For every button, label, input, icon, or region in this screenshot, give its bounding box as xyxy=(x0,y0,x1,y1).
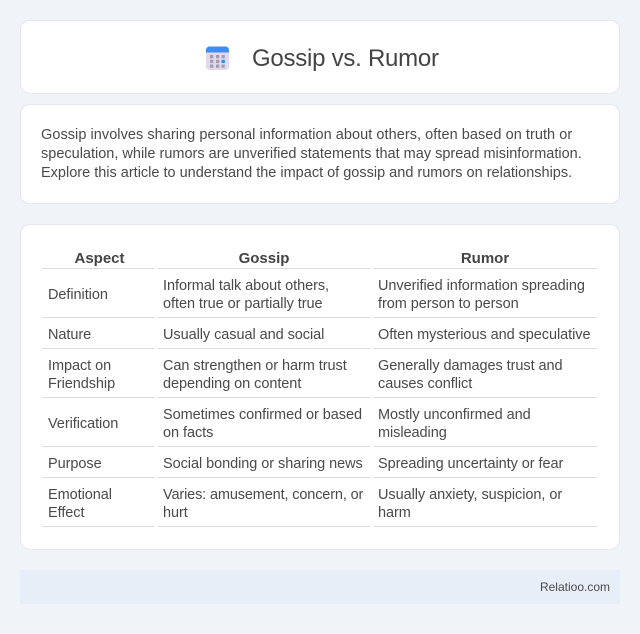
row: Purpose xyxy=(42,456,597,478)
row: Nature: Often mysterious and speculative xyxy=(378,327,590,343)
row: Purpose: Social bonding or sharing news xyxy=(163,456,363,472)
panel: header xyxy=(20,20,620,94)
row: Verification: Sometimes confirmed or based xyxy=(163,407,362,423)
row: Nature xyxy=(42,327,597,349)
row: Emotional Effect: Varies: amusement, concern, or xyxy=(163,487,363,503)
row: Verification: Verification xyxy=(48,416,118,432)
row: Definition: from person to person xyxy=(378,296,519,312)
row: Nature: Nature xyxy=(48,327,91,343)
row: Emotional Effect: Usually anxiety, suspicion, or xyxy=(378,487,562,503)
row: Definition: Unverified information spreading xyxy=(378,278,585,294)
row: Definition: often true or partially true xyxy=(163,296,323,312)
row: Purpose: Purpose xyxy=(48,456,102,472)
footer credit: Relatioo.com xyxy=(540,580,610,594)
row: Verification xyxy=(42,407,597,447)
row: Verification: Mostly unconfirmed and xyxy=(378,407,531,423)
row: Verification: misleading xyxy=(378,425,447,441)
row: Purpose: Spreading uncertainty or fear xyxy=(378,456,563,472)
row: Emotional Effect xyxy=(42,487,597,527)
row: Emotional Effect: harm xyxy=(378,505,411,521)
row: Nature: Usually casual and social xyxy=(163,327,324,343)
row: Definition: Definition xyxy=(48,287,108,303)
icon: calendar xyxy=(206,46,229,70)
title: Gossip vs. Rumor xyxy=(252,45,439,72)
intro paragraph xyxy=(41,127,582,181)
table header row xyxy=(42,250,597,269)
row: Emotional Effect: Emotional xyxy=(48,487,112,503)
row: Emotional Effect: hurt xyxy=(163,505,188,521)
row: Definition xyxy=(42,278,597,318)
row: Impact on Friendship: Generally damages trust and xyxy=(378,358,563,374)
row: Impact on Friendship: Friendship xyxy=(48,376,115,392)
row: Impact on Friendship: Impact on xyxy=(48,358,111,374)
row: Verification: on facts xyxy=(163,425,213,441)
footer bar xyxy=(20,570,620,604)
row: Emotional Effect: Effect xyxy=(48,505,84,521)
panel: comparison table xyxy=(20,224,620,550)
table header row: Gossip xyxy=(239,250,289,267)
row: Impact on Friendship xyxy=(42,358,597,398)
intro paragraph: Explore this article to understand the impact of gossip and rumors on relationships. xyxy=(41,165,572,181)
row: Impact on Friendship: Can strengthen or harm trust xyxy=(163,358,347,374)
intro paragraph: speculation, while rumors are unverified statements that may spread misinformation. xyxy=(41,146,582,162)
intro paragraph: Gossip involves sharing personal information about others, often based on truth or xyxy=(41,127,572,143)
table header row: Aspect xyxy=(74,250,125,267)
table header row: Rumor xyxy=(461,250,509,267)
row: Impact on Friendship: causes conflict xyxy=(378,376,472,392)
row: Definition: Informal talk about others, xyxy=(163,278,329,294)
panel: intro text xyxy=(20,104,620,204)
row: Impact on Friendship: depending on content xyxy=(163,376,301,392)
